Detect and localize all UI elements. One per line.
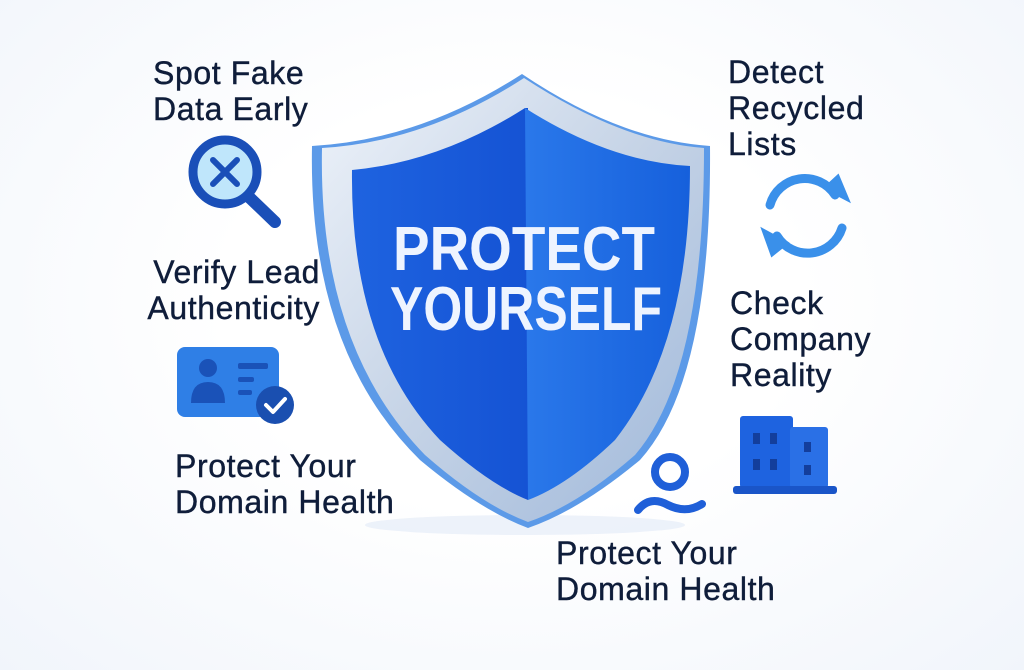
icon: person (638, 457, 702, 510)
text: protect your domain health left (175, 448, 394, 520)
text: check company reality (730, 285, 871, 393)
text: verify lead authenticity: Verify Lead (153, 254, 320, 290)
icon: id card with check (177, 347, 294, 424)
text: verify lead authenticity: Authenticity (147, 290, 320, 326)
text: protect your domain health right: Domain Health (556, 571, 775, 607)
text: check company reality: Check (730, 285, 824, 321)
shield title: YOURSELF (390, 275, 662, 344)
text: protect your domain health left: Domain Health (175, 484, 394, 520)
text: protect your domain health left: Protect Your (175, 448, 357, 484)
text: spot fake data early: Data Early (153, 91, 308, 127)
icon: building (733, 416, 837, 494)
text: detect recycled lists: Detect (728, 54, 824, 90)
text: verify lead authenticity (147, 254, 320, 326)
text: detect recycled lists (728, 54, 864, 162)
text: spot fake data early (153, 55, 308, 127)
icon: magnifier with x (193, 140, 275, 222)
icon: recycle arrows (763, 176, 848, 255)
text: spot fake data early: Spot Fake (153, 55, 304, 91)
shield (312, 74, 710, 535)
shield title: PROTECT (393, 215, 655, 284)
text: protect your domain health right: Protect Your (556, 535, 738, 571)
text: protect your domain health right (556, 535, 775, 607)
shield title (390, 215, 662, 344)
text: check company reality: Reality (730, 357, 832, 393)
text: check company reality: Company (730, 321, 871, 357)
text: detect recycled lists: Recycled (728, 90, 864, 126)
text: detect recycled lists: Lists (728, 126, 797, 162)
